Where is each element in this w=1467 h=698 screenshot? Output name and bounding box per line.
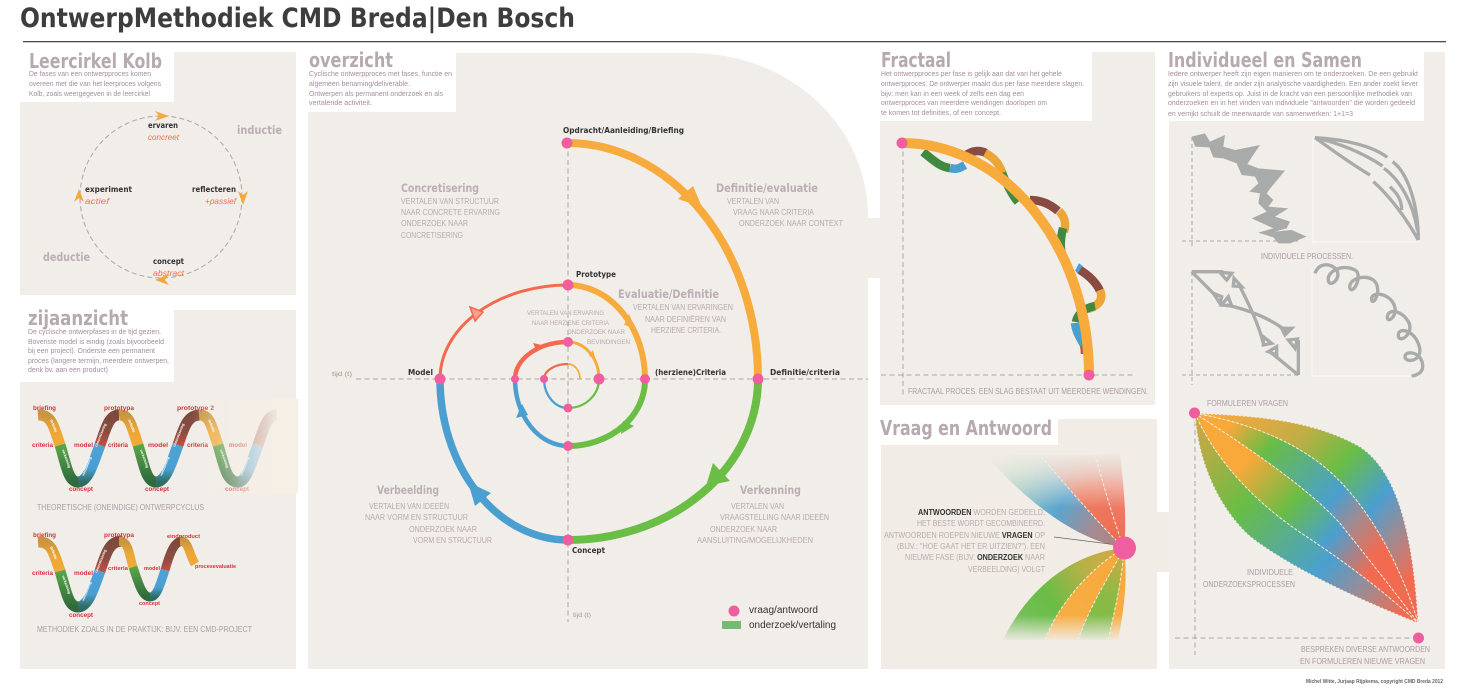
text block: Evaluatie/Definitie: NAAR DEFINIËREN VAN xyxy=(645,315,726,324)
chart: practical finite ribbon: concretisering xyxy=(94,549,107,573)
charts: individual process shapes xyxy=(1192,133,1423,376)
labels: first wave: criteria xyxy=(108,442,128,449)
text block: Verkenning: VRAAGSTELLING NAAR IDEEËN xyxy=(720,513,829,522)
labels: first wave: concept xyxy=(145,486,170,493)
chart: theoretical endless ribbon: verkenning xyxy=(139,449,149,468)
label: individuele onderzoeksprocessen xyxy=(1203,568,1295,589)
text block: inner ring xyxy=(527,310,630,346)
heading: overzicht: overzicht xyxy=(309,48,393,72)
text block: Definitie/evaluatie: Definitie/evaluatie xyxy=(716,181,818,195)
chart: theoretical endless ribbon: verbeelding xyxy=(81,456,92,476)
text block: Kolb intro xyxy=(29,69,161,98)
chart: practical finite ribbon: definitie xyxy=(49,546,58,560)
labels: first wave: model xyxy=(74,442,93,449)
nodes: fractal start and end xyxy=(896,138,1094,380)
text block: overzicht intro: Ontwerpen als permanent onderzoek en als xyxy=(309,89,443,98)
panel: overzicht xyxy=(308,48,881,669)
text block: antwoorden: ANTWOORDEN WORDEN GEDEELD. xyxy=(918,508,1045,517)
text block: Kolb intro: De fases van een ontwerpproces komen xyxy=(29,69,151,78)
chart: theoretical endless ribbon: definitie xyxy=(49,419,58,433)
label: concept xyxy=(153,257,185,278)
label: experiment xyxy=(85,185,132,206)
panel: zijaanzicht xyxy=(20,306,298,669)
text block: overzicht intro xyxy=(309,69,452,107)
chart: triangle crossing process xyxy=(1192,272,1298,375)
text block: Verkenning: ONDERZOEK NAAR xyxy=(710,525,777,534)
text block: antwoorden: (BIJV.: "HOE GAAT HET ER UITZIEN?"). EEN xyxy=(897,542,1045,551)
caption: fractaal proces: FRACTAAL PROCES. EEN SLAG BESTAAT UIT MEERDERE WENDINGEN. xyxy=(908,387,1148,396)
chart: theoretical endless ribbon: concretisering xyxy=(94,423,107,447)
axes: individual processes xyxy=(1182,137,1300,385)
axes: shared process xyxy=(1175,413,1415,655)
chart: branching curve process xyxy=(1315,138,1418,240)
text block: zijaanzicht intro: De cyclische ontwerpfases in de tijd gezien. xyxy=(28,327,161,336)
chart: theoretical endless ribbon: verkenning xyxy=(219,449,229,468)
labels: first wave: prototypa xyxy=(104,405,134,412)
text block: Concretisering: NAAR CONCRETE ERVARING xyxy=(401,208,500,217)
text block: inner ring: VERTALEN VAN ERVARING xyxy=(527,310,604,317)
labels: second wave: concept xyxy=(139,601,160,607)
heading: Individueel en Samen: Individueel en Samen xyxy=(1168,48,1362,72)
axes: time xyxy=(356,143,868,622)
label: tijd horizontal: tijd (t) xyxy=(332,372,352,378)
chart: theoretical endless ribbon: verbeelding xyxy=(239,456,250,476)
node labels: Model xyxy=(408,368,433,377)
text block: Definitie/evaluatie xyxy=(716,181,843,228)
label: experiment: actief xyxy=(85,196,111,206)
labels: second wave: model xyxy=(74,570,93,577)
text block: antwoorden: VERBEELDING) VOLGT xyxy=(968,565,1045,574)
text block: Kolb intro: Kolb, zoals weergegeven in de leercirkel xyxy=(29,89,150,98)
text block: Concretisering: VERTALEN VAN STRUCTUUR xyxy=(401,197,499,206)
leader line xyxy=(1054,537,1110,544)
chart: upper answer fan xyxy=(975,450,1130,548)
label: reflecteren: reflecteren xyxy=(192,185,236,194)
text block: Verbeelding: NAAR VORM EN STRUCTUUR xyxy=(365,513,468,522)
chart: fractal twisted ribbon xyxy=(902,143,1101,375)
chart: practical finite ribbon: verkenning xyxy=(61,575,71,594)
text block: Concretisering: CONCRETISERING xyxy=(401,231,463,240)
arrows: spiral direction xyxy=(468,186,730,506)
text block: Evaluatie/Definitie: VERTALEN VAN ERVARINGEN xyxy=(633,303,733,312)
panel dividers xyxy=(1312,137,1420,376)
labels: first wave: prototype 2 xyxy=(177,405,214,412)
label: reflecteren xyxy=(192,185,238,206)
text block: Kolb intro: overeen met die van het leerproces volgens xyxy=(29,79,161,88)
node labels xyxy=(408,126,840,555)
text block: Verbeelding xyxy=(365,483,492,545)
caption: theoretische ontwerpcyclus: THEORETISCHE (ONEINDIGE) ONTWERPCYCLUS xyxy=(37,503,204,512)
text block: Individueel intro xyxy=(1168,69,1419,118)
label: concept: concept xyxy=(153,257,184,266)
chart: jagged process xyxy=(1192,133,1307,243)
text block: zijaanzicht intro xyxy=(28,327,169,374)
text block: Individueel intro: en verrijkt schuilt de meerwaarde van samenwerken: 1+1=3 xyxy=(1168,109,1353,118)
label: individuele onderzoeksprocessen: INDIVIDUELE xyxy=(1247,568,1293,577)
node labels: Opdracht/Aanleiding/Briefing xyxy=(563,126,684,135)
nodes: leaf start and end xyxy=(1189,408,1424,644)
chart: practical finite ribbon xyxy=(32,532,236,619)
label: experiment: experiment xyxy=(85,185,132,194)
text block: inner ring: ONDERZOEK NAAR xyxy=(567,329,625,336)
text block: antwoorden xyxy=(884,508,1045,574)
chart: spiral xyxy=(440,143,758,540)
text block: Fractaal intro: ontwerpproces van meerdere wendingen doorlopen om xyxy=(881,98,1047,107)
text block: Concretisering: ONDERZOEK NAAR xyxy=(401,219,468,228)
chart: theoretical endless ribbon: concretisering xyxy=(172,423,185,447)
chart: shared research leaf xyxy=(1195,413,1418,623)
chart: lower question fan xyxy=(995,548,1135,642)
label: bespreken antwoorden: BESPREKEN DIVERSE ANTWOORDEN xyxy=(1301,645,1430,654)
labels: first wave: criteria xyxy=(187,442,208,449)
chart: Kolb cycle circle xyxy=(80,116,242,278)
icon: arrow right xyxy=(238,191,248,205)
text block: antwoorden: ANTWOORDEN ROEPEN NIEUWE VRAGEN OP xyxy=(884,531,1045,540)
text block: Individueel intro: gebruikers of experts op. Juist in de kracht van een persoonlijke methodiek van xyxy=(1168,89,1412,98)
label: inductie: inductie xyxy=(237,123,282,137)
text block: inner ring: BEVINDINGEN xyxy=(587,339,630,346)
text block: Verbeelding: VERTALEN VAN IDEEËN xyxy=(369,502,449,511)
text block: Fractaal intro: ontwerpproces. De ontwerper maakt dus per fase meerdere slagen. xyxy=(881,79,1084,88)
label: ervaren: ervaren xyxy=(148,121,178,130)
labels: second wave: criteria xyxy=(108,566,129,572)
node labels: Prototype xyxy=(576,270,617,279)
heading: zijaanzicht: zijaanzicht xyxy=(28,306,128,330)
label: individuele onderzoeksprocessen: ONDERZOEKSPROCESSEN xyxy=(1203,580,1295,589)
text block: Individueel intro: Iedere ontwerper heeft zijn eigen manieren om te onderzoeken. De een gebruikt xyxy=(1168,69,1419,78)
title: OntwerpMethodiek CMD Breda|Den Bosch xyxy=(20,3,575,34)
labels: second wave: prototypa xyxy=(104,532,134,539)
labels: first wave: concept xyxy=(69,486,94,493)
text block: zijaanzicht intro: proces (langere termijn, meerdere ontwerpen, xyxy=(28,356,169,365)
label: ervaren: concreet xyxy=(148,132,180,142)
text block: Verkenning: Verkenning xyxy=(740,483,801,497)
text block: Individueel intro: onderzoeken en in het vinden van individuele "antwoorden" die worden gedeeld xyxy=(1168,98,1415,107)
text block: zijaanzicht intro: Bovenste model is eindig (zoals bijvoorbeeld xyxy=(28,337,164,346)
icon: arrow left xyxy=(74,189,84,202)
text block: Verbeelding: ONDERZOEK NAAR xyxy=(409,525,477,534)
text block: Fractaal intro: Het ontwerpproces per fase is gelijk aan dat van het gehele xyxy=(881,69,1062,78)
label: bespreken antwoorden xyxy=(1300,645,1430,666)
chart: looping process xyxy=(1315,265,1423,376)
panel: Vraag en Antwoord xyxy=(880,416,1169,669)
label: reflecteren: +passief xyxy=(205,196,238,206)
heading: Vraag en Antwoord: Vraag en Antwoord xyxy=(880,416,1052,440)
text block: Verbeelding: VORM EN STRUCTUUR xyxy=(413,536,492,545)
labels: second wave: eindproduct xyxy=(167,534,200,540)
labels: first wave: model xyxy=(229,442,247,449)
heading: Fractaal: Fractaal xyxy=(881,48,951,72)
chart: theoretical endless ribbon: verkenning xyxy=(61,449,71,468)
labels: second wave: procesevaluatie xyxy=(195,564,236,570)
node labels: Definitie/criteria xyxy=(770,368,840,377)
text block: Definitie/evaluatie: VERTALEN VAN xyxy=(727,197,779,206)
text block: overzicht intro: algemeen benaming/deliverable. xyxy=(309,79,410,88)
icon: arrow bottom xyxy=(155,274,169,285)
labels: second wave: concept xyxy=(69,612,94,619)
text block: Evaluatie/Definitie xyxy=(618,287,733,335)
labels: first wave: model xyxy=(148,442,168,449)
panel: Fractaal xyxy=(880,48,1155,405)
icon: arrow top xyxy=(155,111,169,121)
credit: Michel Witte, Jurjaap Rijpkema, copyright CMD Breda 2012 xyxy=(1306,679,1443,685)
labels: first wave xyxy=(32,405,250,493)
text block: zijaanzicht intro: bij een project). Onderste een permanent xyxy=(28,346,156,355)
label: formuleren vragen: FORMULEREN VRAGEN xyxy=(1207,399,1288,408)
labels: second wave: criteria xyxy=(32,570,53,577)
labels: second wave: briefing xyxy=(33,532,56,539)
text block: Concretisering xyxy=(401,181,500,240)
text block: Evaluatie/Definitie: HERZIENE CRITERIA. xyxy=(651,326,721,335)
legend: onderzoek/vertaling xyxy=(749,620,836,631)
label: concept: abstract xyxy=(153,268,185,278)
text block: Fractaal intro: bijv: men kan in een week of zelfs een dag een xyxy=(881,89,1024,98)
text block: Fractaal intro: te komen tot definities, of een concept. xyxy=(881,108,1001,117)
text block: Definitie/evaluatie: VRAAG NAAR CRITERIA xyxy=(733,208,815,217)
text block: zijaanzicht intro: denk bv. aan een product) xyxy=(28,365,108,374)
node labels: Concept xyxy=(572,546,605,555)
label: tijd vertical: tijd (t) xyxy=(573,613,591,619)
axes: fractal xyxy=(881,143,1136,395)
labels: first wave: criteria xyxy=(32,442,53,449)
node: vraag antwoord xyxy=(1113,536,1136,560)
chart: theoretical endless ribbon: definitie xyxy=(207,419,216,433)
text block: Verkenning: VERTALEN VAN xyxy=(731,502,784,511)
text block: Verkenning: AANSLUITING/MOGELIJKHEDEN xyxy=(697,536,813,545)
text block: overzicht intro: Cyclische ontwerpproces met fases, functie en xyxy=(309,69,452,78)
label: ervaren xyxy=(148,121,180,142)
chart: practical finite ribbon: verbeelding xyxy=(81,581,92,601)
labels: first wave: briefing xyxy=(33,405,56,412)
text block: Fractaal intro xyxy=(881,69,1084,117)
labels: second wave: model xyxy=(144,566,160,572)
text block: antwoorden: NIEUWE FASE (BIJV. ONDERZOEK NAAR xyxy=(905,553,1045,562)
legend xyxy=(722,605,836,631)
legend: vraag/antwoord xyxy=(749,605,818,616)
text block: Individueel intro: zijn visuele talent, de ander zijn analytische vaardigheden. Een ander zoekt liever xyxy=(1168,79,1418,88)
text block: antwoorden: HET BESTE WORDT GECOMBINEERD. xyxy=(917,519,1045,528)
labels: first wave: concept xyxy=(225,486,250,493)
caption: methodiek in de praktijk: METHODIEK ZOALS IN DE PRAKTIJK: BIJV. EEN CMD-PROJECT xyxy=(37,625,252,634)
caption: individuele processen: INDIVIDUELE PROCESSEN. xyxy=(1261,252,1353,261)
chart: theoretical endless ribbon: definitie xyxy=(127,419,136,433)
heading: Leercirkel Kolb: Leercirkel Kolb xyxy=(29,49,162,73)
panel: Individueel en Samen xyxy=(1168,48,1445,669)
nodes: vraag/antwoord points xyxy=(434,138,764,546)
text block: inner ring: NAAR HERZIENE CRITERIA xyxy=(532,320,610,327)
labels: second wave xyxy=(32,532,236,619)
text block: Verkenning xyxy=(697,483,829,545)
panel: Leercirkel Kolb xyxy=(20,49,296,295)
label: bespreken antwoorden: EN FORMULEREN NIEUWE VRAGEN xyxy=(1300,657,1425,666)
chart: theoretical endless ribbon: verbeelding xyxy=(159,456,170,476)
node labels: (herziene)Criteria xyxy=(655,368,726,377)
text block: Verbeelding: Verbeelding xyxy=(377,483,439,497)
text block: Evaluatie/Definitie: Evaluatie/Definitie xyxy=(618,287,719,301)
chart: theoretical endless ribbon xyxy=(32,399,298,493)
text block: Concretisering: Concretisering xyxy=(401,181,479,195)
label: deductie: deductie xyxy=(43,250,90,264)
text block: overzicht intro: vertalende activiteit. xyxy=(309,98,372,107)
text block: Definitie/evaluatie: ONDERZOEK NAAR CONTEXT xyxy=(739,219,843,228)
